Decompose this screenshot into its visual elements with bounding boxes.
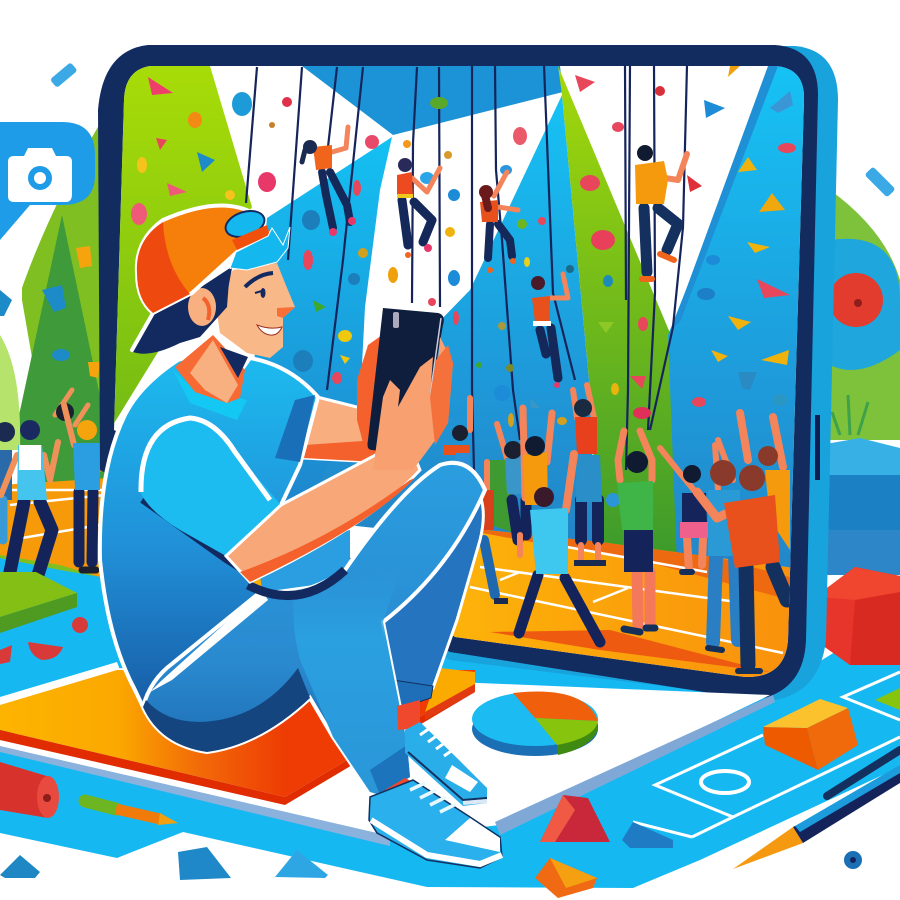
back leg — [380, 480, 483, 708]
orange block — [763, 699, 858, 770]
ropes — [246, 65, 687, 470]
crowd — [443, 385, 790, 671]
green mat — [0, 572, 77, 633]
person blue and red — [573, 385, 606, 566]
socks — [380, 700, 420, 800]
decorative sticks — [50, 62, 896, 198]
climber 4 — [531, 274, 568, 388]
white floor panel — [0, 668, 770, 838]
panel edge strips — [0, 662, 775, 846]
main floor — [0, 558, 900, 888]
orange mat — [0, 668, 475, 805]
hand on phone — [373, 337, 453, 470]
left holds on wall — [0, 246, 100, 378]
back shoe — [405, 722, 487, 806]
climber 5 — [635, 145, 687, 279]
climber 3 — [479, 172, 518, 273]
climbing holds — [131, 66, 796, 507]
gap under forearm — [232, 530, 350, 592]
climber 2 — [397, 158, 440, 258]
ball — [844, 851, 862, 869]
person orange back — [740, 413, 790, 550]
cap — [132, 205, 290, 350]
person behind knee — [482, 462, 508, 604]
climber 1 — [302, 127, 356, 236]
phone-side forearm — [303, 333, 400, 462]
person red — [697, 465, 787, 671]
pencil — [733, 750, 900, 869]
person far left — [443, 398, 470, 465]
person navy — [660, 448, 708, 572]
wall panels — [110, 66, 810, 600]
photo bubble — [0, 122, 95, 240]
person blue shirt back — [497, 424, 526, 555]
plant — [832, 395, 868, 435]
gym floor — [453, 530, 790, 677]
small holds on floor left — [0, 617, 88, 664]
left gym floor — [0, 478, 110, 580]
person green — [617, 431, 655, 632]
person blue jeans — [708, 440, 740, 650]
front leg — [143, 463, 485, 795]
person light blue — [519, 454, 600, 642]
green tab — [875, 688, 900, 710]
front shoe — [369, 780, 502, 868]
front arm — [226, 420, 420, 582]
right blocks — [815, 438, 900, 665]
background hills — [0, 115, 900, 600]
shirt — [100, 335, 318, 707]
pie chart — [472, 692, 598, 756]
phone — [368, 308, 444, 452]
floor court markings — [633, 672, 900, 837]
person orange shirt — [523, 408, 552, 505]
red tube — [0, 762, 59, 818]
neck shade and head — [133, 263, 295, 358]
screen — [110, 60, 810, 690]
left background people — [0, 390, 100, 575]
bottom holds — [0, 795, 673, 898]
marker — [85, 801, 178, 825]
tablet frame — [98, 45, 838, 700]
